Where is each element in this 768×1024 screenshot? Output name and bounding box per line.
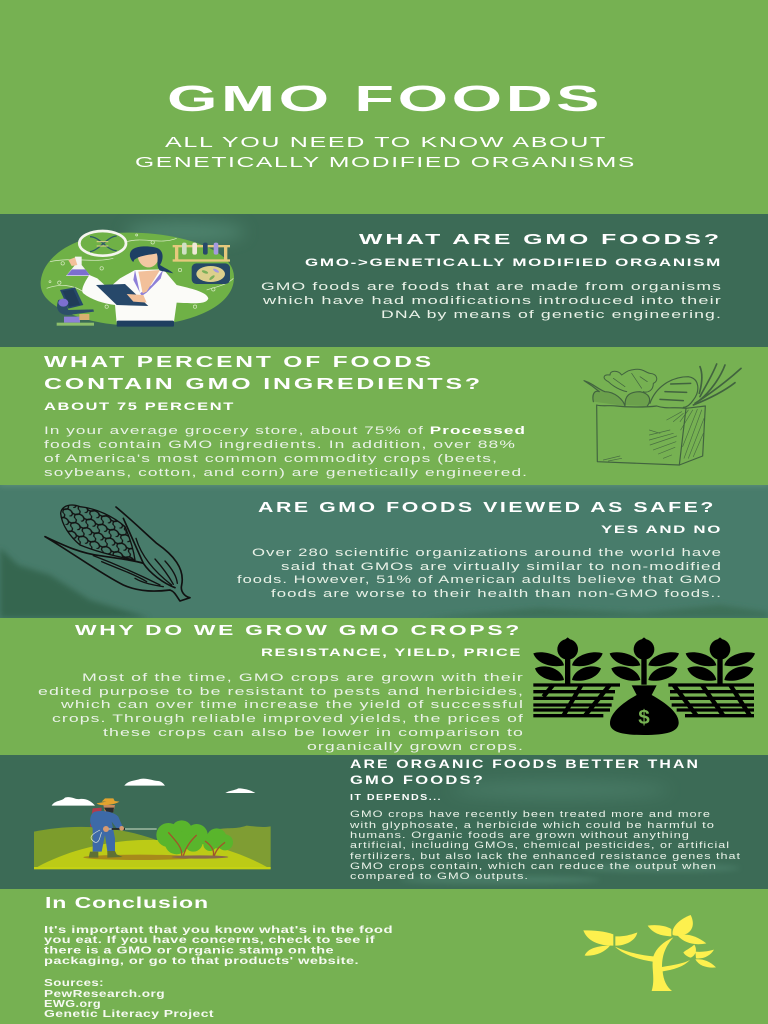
text block: GMO foods are foods that are made from organisms xyxy=(261,281,722,293)
text block xyxy=(349,809,741,881)
text block: foods are worse to their health than non-GMO foods.. xyxy=(271,588,722,600)
icon: corn xyxy=(45,505,190,601)
subtitle: ALL YOU NEED TO KNOW ABOUT xyxy=(165,134,607,151)
sources: EWG.org xyxy=(44,999,101,1010)
heading: ARE ORGANIC FOODS BETTER THAN xyxy=(350,757,700,771)
icon: crops and money bag: $ xyxy=(638,706,650,729)
text block: Over 280 scientific organizations around the world have xyxy=(252,547,722,559)
text block: edited purpose to be resistant to pests and herbicides, xyxy=(38,686,524,698)
panel: why grow GMO crops xyxy=(38,622,755,753)
icon: farmer spraying crops xyxy=(34,779,271,869)
heading: CONTAIN GMO INGREDIENTS? xyxy=(44,376,483,393)
icon: yellow sprout tree xyxy=(583,915,716,991)
text block: fertilizers, but also lack the enhanced resistance genes that xyxy=(350,851,741,861)
subheading: RESISTANCE, YIELD, PRICE xyxy=(261,647,522,659)
heading: In Conclusion xyxy=(45,895,209,912)
heading: WHAT PERCENT OF FOODS xyxy=(44,354,434,371)
panel: what are GMO foods xyxy=(0,214,768,347)
subheading: IT DEPENDS... xyxy=(350,793,442,802)
text block: with glyphosate, a herbicide which could be harmful to xyxy=(349,820,715,830)
text block: It's important that you know what's in the food xyxy=(44,925,393,936)
text block: these crops can also be lower in comparison to xyxy=(103,727,524,739)
title: GMO FOODS xyxy=(167,78,603,119)
text block: you eat. If you have concerns, check to see if xyxy=(44,935,376,946)
sources: Genetic Literacy Project xyxy=(44,1009,215,1020)
text block xyxy=(38,672,524,753)
text block xyxy=(44,925,393,967)
text block xyxy=(261,281,722,321)
panel: conclusion xyxy=(44,895,716,1020)
panel: viewed as safe xyxy=(0,480,768,618)
panel: percent of foods xyxy=(44,354,741,479)
text block xyxy=(237,547,722,600)
heading xyxy=(350,757,700,787)
heading: GMO FOODS? xyxy=(350,773,485,787)
subtitle xyxy=(135,134,636,171)
text block: artificial, including GMOs, chemical pesticides, or artificial xyxy=(350,840,730,850)
text block: which can over time increase the yield of successful xyxy=(59,699,524,711)
icon: grocery bag xyxy=(584,364,741,465)
text block: In your average grocery store, about 75% of Processed xyxy=(44,425,526,437)
text block: humans. Organic foods are grown without anything xyxy=(350,830,690,840)
panel: organic vs GMO xyxy=(0,755,768,889)
text block: crops. Through reliable improved yields, the prices of xyxy=(52,713,524,725)
text block: GMO crops have recently been treated more and more xyxy=(350,809,711,819)
header xyxy=(135,78,636,171)
heading xyxy=(44,354,483,393)
text block: said that GMOs are virtually similar to non-modified xyxy=(281,561,722,573)
subheading: YES AND NO xyxy=(601,524,722,536)
icon: scientist illustration xyxy=(41,231,234,327)
text block: foods contain GMO ingredients. In addition, over 88% xyxy=(44,439,516,451)
text block: DNA by means of genetic engineering. xyxy=(381,309,722,321)
subheading: GMO->GENETICALLY MODIFIED ORGANISM xyxy=(305,257,722,269)
heading: ARE GMO FOODS VIEWED AS SAFE? xyxy=(258,499,716,516)
subheading: ABOUT 75 PERCENT xyxy=(44,401,235,413)
text block: soybeans, cotton, and corn) are genetically engineered. xyxy=(44,467,528,479)
sources: Sources: xyxy=(44,978,104,989)
sources xyxy=(44,978,215,1020)
sources: PewResearch.org xyxy=(44,989,165,1000)
heading: WHY DO WE GROW GMO CROPS? xyxy=(75,622,522,639)
text block xyxy=(44,425,528,479)
text block: Most of the time, GMO crops are grown with their xyxy=(82,672,524,684)
text block: which have had modifications introduced into their xyxy=(261,295,722,307)
text block: packaging, or go to that products' website. xyxy=(44,956,359,967)
subtitle: GENETICALLY MODIFIED ORGANISMS xyxy=(135,154,636,171)
text block: foods. However, 51% of American adults believe that GMO xyxy=(237,574,722,586)
icon: crops and money bag xyxy=(533,637,755,735)
text block: compared to GMO outputs. xyxy=(350,871,529,881)
text block: of America's most common commodity crops (beets, xyxy=(44,453,498,465)
text block: there is a GMO or Organic stamp on the xyxy=(44,946,334,956)
text block: GMO crops contain, which can reduce the output when xyxy=(350,861,717,871)
heading: WHAT ARE GMO FOODS? xyxy=(359,231,722,248)
text block: organically grown crops. xyxy=(307,741,524,753)
